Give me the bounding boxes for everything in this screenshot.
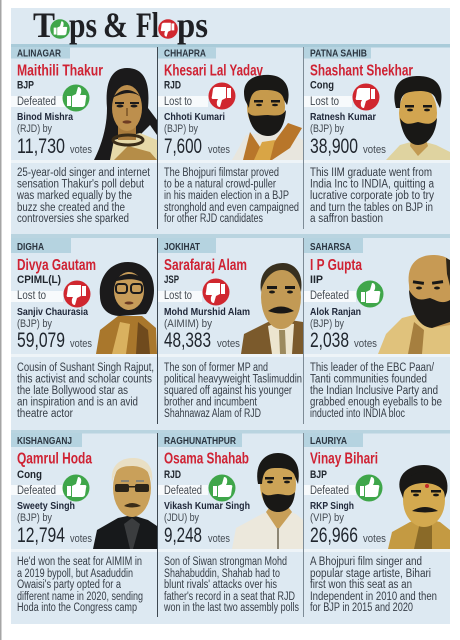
icon: thumbs up	[356, 474, 382, 502]
panel: Osama Shahab: RAGHUNATHPUR	[164, 436, 237, 447]
panel: Shashant Shekhar: votes	[363, 144, 386, 156]
description: brother and incumbent	[164, 396, 258, 408]
description: controversies she sparked	[17, 213, 129, 225]
title: &	[103, 5, 128, 45]
description: a 2019 bypoll, but Asaduddin	[17, 568, 133, 580]
panel: Vinay Bihari: 26,966	[310, 524, 358, 547]
panel: Shashant Shekhar: Ratnesh Kumar	[310, 111, 376, 123]
description: Son of Siwan strongman Mohd	[164, 556, 287, 568]
panel: Qamrul Hoda: Sweety Singh	[17, 500, 75, 512]
panel: I P Gupta: (BJP) by	[310, 318, 344, 330]
panel: Khesari Lal Yadav: (BJP) by	[164, 123, 198, 135]
panel: Qamrul Hoda	[11, 433, 157, 614]
description: inducted into INDIA bloc	[310, 408, 405, 420]
description	[17, 362, 154, 420]
description: in his maiden election in a BJP	[164, 190, 289, 202]
description: the late Bollywood star as	[17, 385, 128, 397]
panel: Sarafaraj Alam: votes	[217, 338, 240, 350]
description: India Inc to INDIA, quitting a	[310, 178, 435, 190]
description: was marked equally by the	[16, 190, 132, 202]
panel: Divya Gautam: 59,079	[17, 329, 65, 352]
description: and turn the tables on BJP in	[310, 202, 433, 214]
portrait: Qamrul Hoda	[93, 458, 157, 549]
panel: Qamrul Hoda: Cong	[17, 469, 42, 481]
title: Fl	[136, 5, 159, 45]
panel: Khesari Lal Yadav	[158, 47, 303, 225]
panel: Khesari Lal Yadav: RJD	[164, 80, 181, 92]
panel: Khesari Lal Yadav: votes	[208, 144, 230, 156]
icon: thumbs down	[352, 84, 380, 110]
panel: Shashant Shekhar: Lost to	[310, 96, 339, 108]
description: Owaisi's party opted for a	[17, 579, 121, 591]
panel: Qamrul Hoda: KISHANGANJ	[17, 436, 72, 447]
description: buzz she created and the	[17, 202, 125, 214]
portrait: Shashant Shekhar	[386, 76, 450, 160]
description: father's record in a seat that RJD	[164, 591, 295, 603]
icon: thumbs down	[64, 280, 90, 308]
icon: thumbs up	[62, 474, 90, 502]
panel: Osama Shahab: (JDU) by	[164, 512, 199, 524]
panel: Qamrul Hoda: 12,794	[17, 524, 65, 547]
portrait: Maithili Thakur	[94, 68, 157, 160]
description	[16, 167, 151, 225]
description: He'd won the seat for AIMIM in	[17, 556, 142, 568]
description: Hoda into the Congress camp	[17, 602, 137, 614]
panel: Qamrul Hoda: votes	[70, 533, 92, 545]
portrait: Khesari Lal Yadav	[232, 75, 303, 160]
description: political heavyweight Taslimuddin	[164, 374, 302, 386]
panel: Divya Gautam: Sanjiv Chaurasia	[17, 306, 88, 318]
panel: I P Gupta: Defeated	[310, 290, 349, 302]
description: Independent in 2010 and then	[310, 591, 437, 603]
panel: Vinay Bihari	[304, 433, 450, 614]
panel: Sarafaraj Alam: (AIMIM) by	[164, 318, 212, 330]
description: for BJP in 2015 and 2020	[310, 602, 413, 614]
panel: I P Gupta: IIP	[310, 274, 323, 286]
panel: Maithili Thakur	[11, 47, 157, 225]
panel: Shashant Shekhar: PATNA SAHIB	[310, 48, 367, 60]
portrait: Vinay Bihari	[388, 465, 450, 549]
panel: Osama Shahab: Vikash Kumar Singh	[164, 500, 250, 512]
panel: Vinay Bihari: LAURIYA	[310, 436, 347, 447]
description: first won this seat as an	[310, 579, 412, 591]
panel: I P Gupta: SAHARSA	[310, 242, 351, 253]
panel: Khesari Lal Yadav: Khesari Lal Yadav	[164, 62, 263, 80]
description: blunt rivals' attacks over his	[164, 579, 277, 591]
description: A Bhojpuri film singer and	[310, 556, 422, 568]
panel: Shashant Shekhar	[304, 47, 450, 225]
panel: Khesari Lal Yadav: 7,600	[164, 135, 202, 158]
description: This IIM graduate went from	[310, 167, 432, 179]
description	[164, 167, 299, 225]
panel: Maithili Thakur: ALINAGAR	[17, 48, 62, 60]
portrait: I P Gupta	[378, 255, 450, 354]
panel: Vinay Bihari: Vinay Bihari	[310, 450, 378, 468]
panel: Osama Shahab: 9,248	[164, 524, 202, 547]
portrait: Osama Shahab	[232, 453, 303, 549]
panel: Sarafaraj Alam	[158, 238, 303, 420]
title	[33, 5, 208, 45]
panel: Maithili Thakur: Defeated	[17, 96, 56, 108]
panel: Qamrul Hoda: Qamrul Hoda	[17, 450, 92, 468]
description: Shahnawaz Alam of RJD	[164, 408, 261, 420]
description	[17, 556, 143, 614]
panel: Sarafaraj Alam: JSP	[164, 274, 179, 286]
description: Tanti communities founded	[310, 374, 427, 386]
description	[310, 167, 435, 225]
panel: Divya Gautam: CPIML(L)	[17, 274, 61, 286]
title: T	[33, 5, 55, 45]
icon: thumbs up	[62, 84, 90, 112]
description: to be a natural crowd-puller	[164, 178, 276, 190]
panel: Osama Shahab: RJD	[164, 469, 181, 481]
panel: Divya Gautam: Divya Gautam	[17, 257, 96, 274]
panel: Shashant Shekhar: (BJP) by	[310, 123, 344, 135]
panel: Maithili Thakur: Binod Mishra	[17, 111, 73, 123]
panel: Vinay Bihari: RKP Singh	[310, 500, 354, 512]
panel: I P Gupta: 2,038	[310, 329, 349, 352]
panel: Maithili Thakur: Maithili Thakur	[17, 62, 103, 80]
panel: Shashant Shekhar: Shashant Shekhar	[310, 62, 413, 80]
panel: Vinay Bihari: votes	[363, 533, 386, 545]
description	[163, 556, 299, 614]
panel: Osama Shahab	[158, 433, 303, 614]
description: squared off against his younger	[164, 385, 292, 397]
portrait: Divya Gautam	[96, 262, 157, 354]
description: The Bhojpuri filmstar proved	[164, 167, 279, 179]
panel: Maithili Thakur: (RJD) by	[17, 123, 52, 135]
panel: Khesari Lal Yadav: CHHAPRA	[164, 48, 206, 60]
panel: Vinay Bihari: (VIP) by	[310, 512, 344, 524]
panel: Maithili Thakur: 11,730	[17, 135, 65, 158]
description: the Indian Inclusive Party and	[310, 385, 438, 397]
title: ps	[69, 5, 97, 45]
panel: Osama Shahab: Osama Shahab	[164, 450, 249, 468]
panel: Sarafaraj Alam: Mohd Murshid Alam	[164, 306, 250, 318]
panel: I P Gupta	[304, 238, 450, 420]
panel: Sarafaraj Alam: 48,383	[164, 329, 211, 352]
panel: Maithili Thakur: votes	[70, 144, 92, 156]
description: Shahabuddin, Shahab had to	[164, 568, 280, 580]
panel: Sarafaraj Alam: JOKIHAT	[164, 242, 200, 253]
description: The son of former MP and	[164, 362, 268, 374]
panel: Divya Gautam: Lost to	[17, 290, 46, 302]
panel: Vinay Bihari: BJP	[310, 469, 327, 481]
description: for other RJD candidates	[164, 213, 263, 225]
description: lucrative corporate job to try	[310, 190, 434, 202]
panel: Divya Gautam: (BJP) by	[17, 318, 52, 330]
panel: I P Gupta: I P Gupta	[310, 257, 362, 274]
icon: thumbs up	[356, 280, 384, 308]
description: sensation Thakur's poll debut	[17, 178, 145, 190]
description	[310, 556, 437, 614]
panel: Osama Shahab: Defeated	[164, 485, 202, 497]
icon: thumbs down	[208, 82, 236, 110]
description: Cousin of Sushant Singh Rajput,	[17, 362, 154, 374]
panel: Vinay Bihari: Defeated	[310, 485, 349, 497]
icon: thumbs down	[202, 278, 230, 306]
panel: I P Gupta: votes	[354, 338, 377, 350]
panel: Khesari Lal Yadav: Chhoti Kumari	[164, 111, 225, 123]
title: o	[52, 5, 68, 45]
panel: Qamrul Hoda: Defeated	[17, 485, 56, 497]
description: stronghold and even campaigned	[164, 202, 299, 214]
panel: Maithili Thakur: BJP	[17, 80, 34, 92]
panel: Sarafaraj Alam: Sarafaraj Alam	[164, 257, 247, 274]
panel: Khesari Lal Yadav: Lost to	[164, 96, 192, 108]
description: theatre actor	[17, 408, 73, 420]
description: 25-year-old singer and internet	[17, 167, 151, 179]
icon: thumbs down in title	[158, 19, 178, 39]
panel: Qamrul Hoda: (BJP) by	[17, 512, 52, 524]
icon: thumbs up	[208, 474, 236, 502]
portrait: Sarafaraj Alam	[241, 263, 303, 354]
panel: Shashant Shekhar: Cong	[310, 80, 334, 92]
description: a saffron bastion	[310, 213, 383, 225]
panel: Divya Gautam: DIGHA	[17, 242, 44, 253]
panel: Divya Gautam	[11, 238, 157, 420]
description: different name in 2020, sending	[17, 591, 143, 603]
description: won in the last two assembly polls	[163, 602, 299, 614]
title: o	[160, 5, 176, 45]
panel: Sarafaraj Alam: Lost to	[164, 290, 192, 302]
panel: Divya Gautam: votes	[70, 338, 92, 350]
panel: Shashant Shekhar: 38,900	[310, 135, 358, 158]
description: this activist and scholar counts	[17, 374, 152, 386]
description: an inspiration and is an avid	[17, 396, 138, 408]
icon: thumbs up in title	[50, 19, 70, 39]
panel: I P Gupta: Alok Ranjan	[310, 306, 361, 318]
panel: Osama Shahab: votes	[208, 533, 230, 545]
description	[310, 362, 442, 420]
description: This leader of the EBC Paan/	[310, 362, 435, 374]
description: popular stage artiste, Bihari	[310, 568, 431, 580]
description	[164, 362, 302, 420]
title: ps	[177, 5, 208, 45]
